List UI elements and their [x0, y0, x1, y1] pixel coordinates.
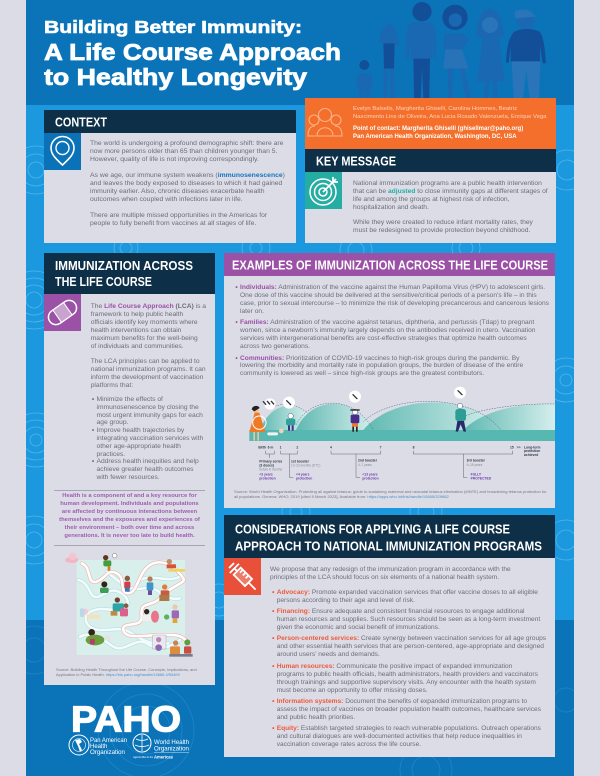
source: building health: Application in Public Health. https://iris.paho.org/handle/10665.2/53409: [56, 672, 180, 676]
panel: examples: •: [235, 319, 238, 326]
text: example list: community is lowered as well – since high-risk groups are the greatest contributors.: [240, 370, 484, 377]
list: platforms: immunosenescence by closing the: [96, 404, 199, 411]
text: key message: must be redesigned to provide protection beyond childhood.: [353, 227, 530, 234]
text: context: and leaves the body exposed to diseases to which it had gained: [90, 180, 282, 187]
title: [44, 17, 341, 90]
text: key message: life and among the groups at highest risk of infection,: [353, 196, 510, 203]
baby: [267, 429, 284, 435]
logo: PAHO: World Health: [154, 740, 189, 746]
chart: vaccination timeline: protection: [259, 476, 276, 480]
chart: vaccination timeline: Birth: [258, 445, 266, 449]
list: platforms: most urgent immunity gaps for each: [96, 412, 203, 419]
source: building health: [56, 666, 197, 677]
list: six elements: and other essential health services that are person-centered, age-appropriate and designed: [277, 643, 544, 650]
text: life course approach: of individuals and communities. The LCA principles can be applied to: [91, 343, 200, 365]
panel: examples: [224, 253, 555, 508]
callout: health statement: Health is a component of and a key resource for: [62, 493, 197, 499]
text: example list: One dose of this vaccine should be delivered at the sensitive/critical periods of a person’s life – in this: [240, 292, 537, 299]
panel: immunization across the life course: •: [92, 427, 94, 434]
text: context: outcomes when coupled with infections later in life. There are multiple missed opportunities in the Americas for: [90, 196, 267, 219]
chart: vaccination timeline: <3 years: [259, 472, 273, 476]
list: six elements: and cultural dialogues are well-documented activities that help reduce inequalities in: [277, 733, 522, 740]
callout: health statement: [59, 493, 200, 539]
text: example list: [235, 284, 549, 377]
chart: vaccination timeline: 2nd booster: [358, 459, 378, 463]
chart: vaccination timeline: >>: [517, 445, 521, 449]
icon: people group: [307, 108, 343, 136]
text: example list: case, prior to sexual intercourse – to minimize the risk of developing precancerous and cancerous lesions: [240, 300, 549, 307]
callout: health statement: human development. Individuals and populations: [60, 501, 199, 507]
chart: vaccination timeline: protection: [296, 476, 312, 480]
chart: vaccination timeline: 2: [296, 445, 298, 449]
text: key message: hospitalization and death. While they were created to reduce infant mortality rates, they: [353, 204, 533, 226]
list: six elements: given the economic and social benefit of immunizations.: [277, 624, 440, 631]
list: six elements: Human resources: Communicate the positive impact of expanded immunization: [277, 663, 512, 670]
callout: health statement: their environment – both over time and across: [65, 525, 194, 531]
characters: [65, 553, 193, 657]
woman curly hair: [442, 5, 468, 30]
chart: vaccination timeline: Primary series: [259, 460, 282, 464]
text: contact: [353, 126, 523, 140]
list: platforms: other age-appropriate health: [96, 443, 181, 450]
title: Building Better Immunity:: [44, 17, 302, 37]
panel: context: [44, 110, 296, 243]
icon: syringe: [224, 558, 261, 595]
heading: immunization across: IMMUNIZATION ACROSS: [55, 258, 193, 273]
logo: PAHO: [68, 698, 189, 760]
list: platforms: with fewer resources.: [96, 474, 160, 481]
text: life course approach: maximum benefits for the well-being: [91, 335, 198, 342]
man: [412, 2, 432, 21]
heading: considerations: CONSIDERATIONS FOR APPLYING A LIFE COURSE: [235, 522, 510, 536]
panel: considerations: [224, 515, 555, 757]
list: platforms: achieve greater health outcomes: [96, 466, 194, 473]
list: six elements: Advocacy: Promote expanded vaccination services that offer vaccine doses to all eligible: [277, 589, 538, 596]
chart: vaccination timeline: 4–7 years: [358, 463, 372, 467]
chart: vaccination timeline: 15: [510, 445, 514, 449]
text: contact: Pan American Health Organization, Washington, DC, USA: [353, 134, 517, 140]
text: life course approach: The Life Course Approach (LCA) is a: [91, 303, 206, 310]
text: life course approach: platforms that:: [91, 382, 133, 389]
text: example list: Individuals: Administration of the vaccine against the Human Papilloma Virus (HPV) to adolescent girls.: [240, 284, 545, 291]
text: contact: Point of contact: Margherita Ghiselli (ghisellmar@paho.org): [353, 126, 523, 132]
source: building health: Source: Building Health Throughout the Life Course. Concepts, Implications, and: [56, 666, 197, 672]
source: WHO: Source: World Health Organization. Protecting all against tetanus: guide to sustaining maternal and neonatal tetanus elimination (MNTE) and broadening tetanus protection for: [234, 489, 547, 494]
chart: vaccination timeline: (3 doses): [259, 464, 274, 468]
child: [359, 60, 369, 70]
text: considerations intro: principles of the LCA should focus on six elements of a national health system.: [270, 574, 499, 581]
title: A Life Course Approach: [44, 39, 341, 65]
text: example list: women, since a newborn’s immunity largely depends on the antibodies received in utero. Vaccination: [240, 327, 535, 334]
text: example list: Communities: Prioritization of COVID-19 vaccines to high-risk groups during the pandemic. By: [240, 355, 519, 362]
text: authors: [353, 106, 546, 120]
text: context: [90, 140, 285, 227]
text: example list: later on.: [240, 308, 264, 315]
callout: health statement: are affected by continuous interactions between: [62, 509, 197, 515]
chart: vaccination timeline: [249, 386, 555, 480]
chart: vaccination timeline: PROTECTED: [471, 476, 492, 480]
chart: vaccination timeline: 1: [280, 445, 282, 449]
text: life course approach: health interventions can obtain: [91, 327, 181, 334]
chart: vaccination timeline: protection: [524, 449, 540, 453]
logo: PAHO: regional office for the: [133, 755, 153, 759]
heading: context: CONTEXT: [55, 114, 107, 130]
list: six elements: through trainings and supportive supervisory visits. Any encounter with the health system: [277, 679, 536, 686]
axis and labels: [266, 451, 513, 477]
heading: key message: KEY MESSAGE: [316, 154, 396, 168]
people silhouettes: [357, 2, 546, 98]
list: six elements: must become an opportunity to offer missing doses.: [277, 687, 428, 694]
heading: immunization across: THE LIFE COURSE: [55, 274, 152, 289]
girl: [379, 24, 399, 52]
text: example list: Families: Administration of the vaccine against tetanus, diphtheria, and pertussis (Tdap) to pregnant: [240, 319, 534, 326]
callout: health statement: generations. It is never too late to build health.: [64, 533, 195, 539]
text: life course approach: framework to help public health: [91, 311, 183, 318]
list: six elements: assess the impact of vaccines on broader population health outcomes, healthcare services: [277, 706, 541, 713]
heading: immunization across: [44, 253, 215, 294]
text: key message: that can be adjusted to close immunity gaps at different stages of: [353, 188, 548, 195]
woman long hair: [476, 8, 504, 38]
chart: vaccination timeline: 4: [330, 445, 332, 449]
icon: bandage: [44, 294, 81, 331]
toddler: [286, 413, 295, 431]
chart: vaccination timeline: Long-term: [524, 445, 540, 449]
list: platforms: practices.: [96, 451, 125, 458]
chart: vaccination timeline: 12–23 months (DTC): [291, 464, 320, 468]
source: WHO: all populations. Geneva: WHO; 2019 [cited 9 March 2023]. Available from: https://apps.who.int/iris/handle/10665/329882: [234, 494, 449, 499]
heading: examples: [224, 253, 555, 276]
list: six elements: [272, 589, 546, 748]
chart: vaccination timeline: 6 m: [268, 445, 273, 449]
chart: vaccination timeline: before 6 months: [259, 467, 283, 471]
icon: target: [305, 172, 342, 209]
list: platforms: Minimize the effects of: [96, 396, 163, 403]
list: six elements: persons according to their age and level of risk.: [277, 597, 415, 604]
panel: examples: •: [235, 284, 238, 291]
mother: [249, 406, 266, 441]
text: example list: services with intergenerational benefits are cost-effective strategies that optimize health outcomes: [240, 335, 527, 342]
text: context: immunity earlier. Also, chronic diseases exacerbate health: [90, 188, 265, 195]
heading: context: [44, 110, 296, 133]
text: considerations intro: [270, 566, 511, 581]
text: life course approach: [90, 303, 206, 389]
text: considerations intro: We propose that any redesign of the immunization program in accordance with the: [270, 566, 511, 573]
list: six elements: vaccination coverage rates across the life course.: [277, 741, 421, 748]
text: life course approach: inform the development of vaccination: [91, 374, 203, 381]
text: context: The world is undergoing a profound demographic shift: there are: [90, 140, 283, 147]
panel: immunization across the life course: [44, 253, 215, 685]
chart: vaccination timeline: 9–15 years: [467, 463, 483, 467]
old man: [516, 11, 535, 30]
chart: vaccination timeline: 1st booster: [291, 459, 310, 463]
text: life course approach: officials identify key moments where: [91, 319, 198, 326]
text: example list: across two generations.: [240, 343, 310, 350]
illustration: life course maze: [65, 552, 193, 657]
text: authors: Evelyn Balsells, Margherita Ghiselli, Carolina Hommes, Beatriz: [353, 106, 517, 112]
text: context: However, quality of life is not improving correspondingly. As we age, our immune system weakens (immunosenescence): [90, 156, 285, 179]
list: platforms: Address health inequities and help: [96, 458, 199, 465]
chart: vaccination timeline: achieved: [524, 453, 538, 457]
chart: vaccination timeline: 7: [380, 445, 382, 449]
list: six elements: Information systems: Document the benefits of expanded immunization programs to: [277, 698, 527, 705]
panel: considerations: •: [272, 663, 274, 670]
chart: vaccination timeline: <13 years: [362, 472, 378, 476]
panel: considerations: •: [272, 589, 274, 596]
panel: considerations: •: [272, 698, 274, 705]
panel: immunization across the life course: •: [92, 458, 94, 465]
chart: vaccination timeline: 3rd booster: [467, 459, 486, 463]
panel: considerations: •: [272, 635, 274, 642]
title: to Healthy Longevity: [44, 64, 307, 90]
text: context: people to fully benefit from vaccines at all stages of life.: [90, 220, 256, 227]
logo: PAHO: Americas: [154, 754, 173, 760]
list: platforms: integrating vaccination services with: [96, 435, 203, 442]
logo: PAHO: Pan American: [90, 738, 127, 744]
list: six elements: Equity: Establish targeted strategies to reach vulnerable populations. Outreach operations: [277, 725, 541, 732]
panel: authors: [305, 98, 556, 149]
list: six elements: around users’ needs and demands.: [277, 651, 380, 658]
text: key message: National immunization programs are a public health intervention: [353, 180, 542, 187]
logo: PAHO: Organization: [90, 750, 125, 756]
chart: vaccination timeline: protection: [362, 476, 379, 480]
chart: vaccination timeline: <4 years: [296, 472, 310, 476]
source: WHO: [234, 489, 547, 499]
list: platforms: Improve health trajectories by: [96, 427, 184, 434]
text: authors: Nascimento Lins de Oliveira, Ana Lucia Rosado Valenzuela, Enrique Vega: [353, 114, 546, 120]
list: platforms: [92, 396, 203, 481]
text: life course approach: national immunization programs. It can: [91, 366, 206, 373]
teen: [455, 403, 466, 432]
list: six elements: human resources and supplies. Such resources should be seen as a long-term investment: [277, 616, 540, 623]
callout: health statement: themselves and the exposures and experiences of: [59, 517, 200, 523]
list: six elements: Financing: Ensure adequate and consistent financial resources to engage additional: [277, 608, 524, 615]
list: six elements: programs to public health officials, health administrators, health providers and vaccinators: [277, 671, 538, 678]
panel: considerations: •: [272, 608, 274, 615]
panel: examples: •: [235, 355, 238, 362]
needle bubbles: [263, 387, 466, 410]
text: context: now more persons older than 65 than children younger than 5.: [90, 148, 277, 155]
list: six elements: and public health priorities.: [277, 714, 355, 721]
logo: PAHO: Organization: [154, 746, 189, 752]
child: [350, 409, 360, 432]
logo: PAHO: Health: [90, 744, 107, 750]
panel: considerations: •: [272, 725, 274, 732]
list: six elements: Person-centered services: Create synergy between vaccination services for all age groups: [277, 635, 546, 642]
panel: key message: [305, 149, 556, 243]
logo: PAHO: PAHO: [71, 698, 181, 740]
heading: considerations: [224, 515, 555, 558]
chart: vaccination timeline: FULLY: [471, 472, 482, 476]
list: platforms: age group.: [96, 419, 128, 426]
text: key message: [353, 180, 548, 234]
heading: key message: [305, 149, 556, 172]
panel: immunization across the life course: •: [92, 396, 94, 403]
icon: location pin: [44, 133, 81, 170]
chart: vaccination timeline: 8: [413, 445, 415, 449]
text: example list: lowering the morbidity and mortality rate in population groups, the burden of disease of the entire: [240, 362, 523, 369]
